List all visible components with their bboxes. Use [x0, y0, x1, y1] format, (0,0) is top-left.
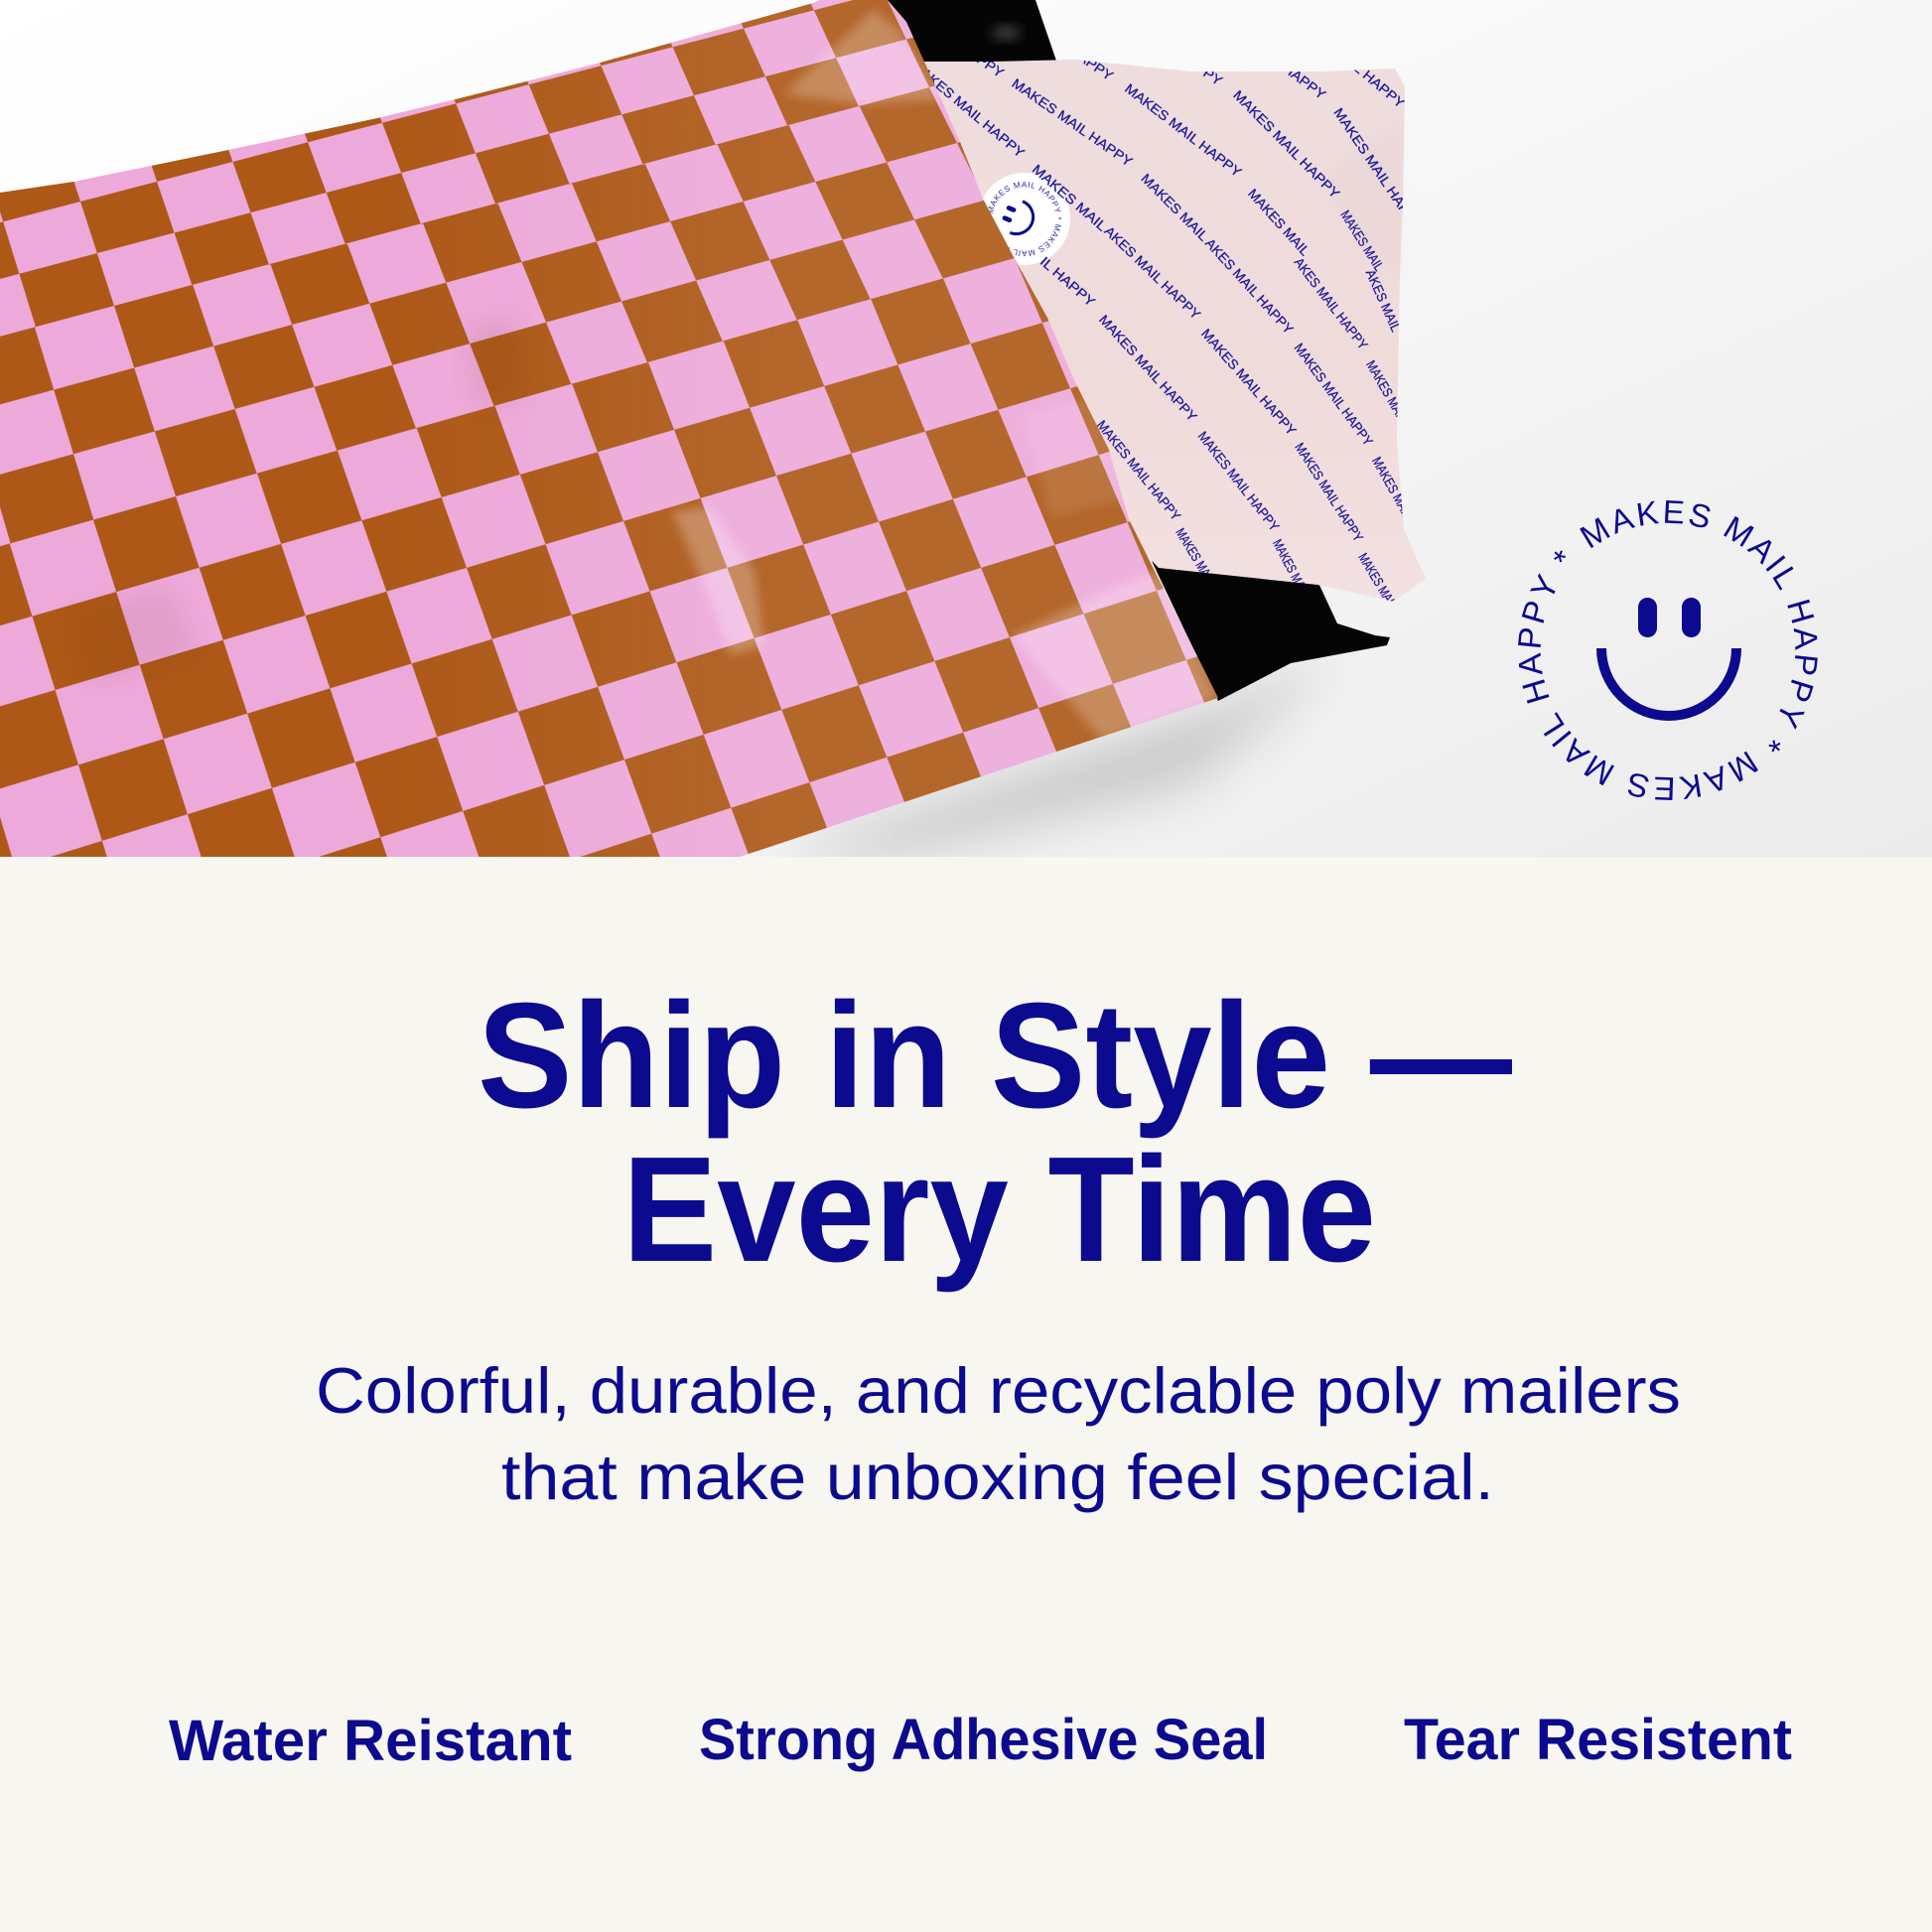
pouch repeated text pattern: MAKES MAIL HAPPY [1230, 87, 1342, 202]
pouch repeated text pattern: AKES MAIL HAPPY [1101, 223, 1203, 323]
pouch repeated text pattern: MAKES MAIL HAPPY [1096, 312, 1200, 424]
pouch repeated text pattern: MAKES MAIL HAPPY [1355, 550, 1420, 643]
pouch repeated text pattern: MAKES MAIL HAPPY [1270, 537, 1329, 631]
pouch repeated text pattern: MAKES MAIL HAPPY [1363, 357, 1431, 460]
pouch repeated text pattern: MAKES MAIL HAPPY [1330, 105, 1424, 234]
pouch repeated text pattern: AKES MAIL HAPPY [1202, 235, 1296, 337]
black flap bottom [1152, 561, 1390, 701]
pouch repeated text pattern: MAKES MAIL [1337, 207, 1387, 274]
pouch repeated text pattern: MAKES MAIL HAPPY [1198, 326, 1300, 438]
feature: water resistant: Water Reistant [169, 1709, 572, 1773]
pouch repeated text pattern: IL HAPPY [1037, 254, 1098, 310]
heading line 1: Ship in Style — [478, 971, 1512, 1139]
checkerboard mailer [0, 0, 1218, 857]
pouch repeated text pattern: MAKES MAIL [1138, 171, 1211, 244]
smiley eye right [1682, 598, 1701, 637]
pink pouch [913, 60, 1426, 602]
pouch repeated text pattern: MAKES MAIL [1245, 186, 1312, 259]
pouch repeated text pattern: MAKES MAIL HAPPY [1292, 440, 1366, 544]
sticker disc and ring text: MAKES MAIL HAPPY * MAKES MAIL HAPPY * [989, 181, 1062, 256]
pouch repeated text pattern: MAKES MAIL HAPPY [1195, 429, 1282, 534]
circular text: MAKES MAIL HAPPY * MAKES MAIL HAPPY * [1518, 500, 1818, 800]
pouch repeated text pattern: MAKES MAIL [1030, 162, 1110, 234]
sticker on pouch [983, 173, 1070, 265]
pouch repeated text pattern: MAKES MAIL HAPPY [1094, 418, 1183, 523]
pouch repeated text pattern: MAKES MAIL HAPPY [908, 58, 1028, 161]
smiley eye left [1638, 598, 1657, 637]
text panel [169, 971, 1792, 1773]
sticker smiley face [998, 197, 1038, 239]
heading line 2: Every Time [622, 1125, 1376, 1293]
subheading line 2: that make unboxing feel special. [501, 1441, 1494, 1513]
subheading line 1: Colorful, durable, and recyclable poly mailers [316, 1354, 1681, 1427]
pouch repeated text pattern: MAKES MAIL HAPPY [1289, 8, 1408, 111]
feature: tear resistant: Tear Resistent [1404, 1708, 1792, 1772]
surface, black flaps and pink pouch [0, 0, 1932, 857]
pouch repeated text pattern [927, 60, 1405, 602]
mailer sheen and folds [97, 0, 1218, 857]
pouch repeated text pattern: MAKES MAIL HAPPY [1122, 80, 1244, 180]
photo panel: mailers on white surface [0, 0, 1932, 857]
black flap top [884, 0, 1057, 64]
pouch repeated text pattern: MAKES MAIL HAPPY [1205, 4, 1328, 102]
round logo: makes mail happy [1518, 500, 1818, 800]
pouch repeated text pattern: AKES MAIL [1363, 267, 1404, 335]
feature: strong adhesive seal: Strong Adhesive Seal [699, 1708, 1268, 1772]
pouch repeated text pattern: MAKES MAIL HAPPY [1292, 341, 1376, 449]
shadow under mailer [774, 655, 1340, 857]
pouch repeated text pattern: AKES MAIL HAPPY [1292, 255, 1371, 352]
pouch repeated text pattern: MAKES MAIL HAPPY [1369, 455, 1436, 557]
pouch repeated text pattern: MAKES MAIL HAPPY [1173, 525, 1237, 619]
pouch repeated text pattern: MAKES MAIL HAPPY [1009, 75, 1135, 170]
smiley mouth [1601, 648, 1736, 716]
